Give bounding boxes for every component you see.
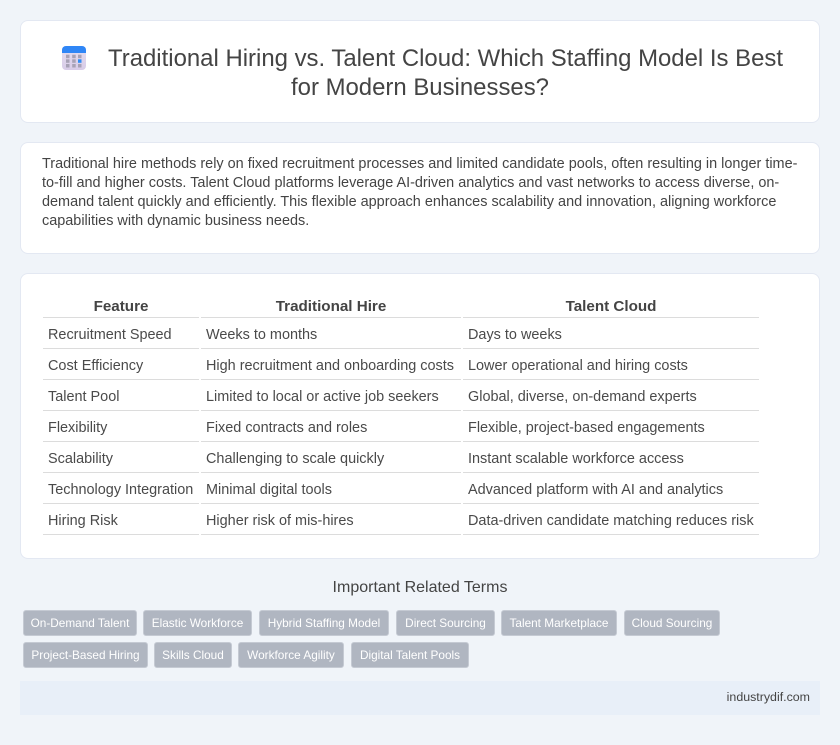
title: Traditional Hiring vs. Talent Cloud: Which Staffing Model Is Best [108, 45, 783, 72]
description text: demand talent quickly and efficiently. This flexible approach enhances scalability and innovation, aligning workforce [42, 194, 776, 210]
tag [23, 610, 137, 636]
row: talent pool [48, 389, 697, 405]
row: cost efficiency [48, 358, 688, 374]
row: cost efficiency: Cost Efficiency [48, 358, 143, 374]
related terms heading: Important Related Terms [333, 579, 507, 596]
row: technology integration: Minimal digital tools [206, 482, 332, 498]
tag: Elastic Workforce [152, 616, 243, 630]
tag [154, 642, 232, 668]
tag: Digital Talent Pools [360, 648, 460, 662]
row: technology integration: Technology Integration [48, 482, 193, 498]
tag: Hybrid Staffing Model [268, 616, 380, 630]
icon: calendar [62, 46, 86, 70]
tag: Talent Marketplace [509, 616, 608, 630]
row: talent pool: Global, diverse, on-demand experts [468, 389, 697, 405]
column headings: Feature [94, 298, 148, 315]
description text: Traditional hire methods rely on fixed recruitment processes and limited candidate pools, often resulting in longer time- [42, 156, 797, 172]
row: recruitment speed: Weeks to months [206, 327, 317, 343]
title: for Modern Businesses? [291, 74, 549, 101]
row: scalability: Instant scalable workforce access [468, 451, 684, 467]
description text: capabilities with dynamic business needs. [42, 213, 309, 229]
tag [23, 642, 148, 668]
tag: On-Demand Talent [31, 616, 129, 630]
description text [42, 156, 797, 229]
row: hiring risk [48, 513, 754, 529]
title [108, 45, 783, 101]
tag: Direct Sourcing [405, 616, 486, 630]
description text: to-fill and higher costs. Talent Cloud platforms leverage AI-driven analytics and vast networks to access diverse, on- [42, 175, 779, 191]
row: cost efficiency: Lower operational and hiring costs [468, 358, 688, 374]
row: hiring risk: Data-driven candidate matching reduces risk [468, 513, 754, 529]
row: flexibility [48, 420, 705, 436]
row: scalability: Challenging to scale quickly [206, 451, 384, 467]
tag [238, 642, 344, 668]
tag: Skills Cloud [162, 648, 224, 662]
row: talent pool: Talent Pool [48, 389, 119, 405]
tag [624, 610, 720, 636]
row: hiring risk: Hiring Risk [48, 513, 118, 529]
row: cost efficiency: High recruitment and onboarding costs [206, 358, 454, 374]
tag [351, 642, 469, 668]
related terms tags [23, 610, 720, 668]
header card [20, 20, 820, 123]
description card [20, 142, 820, 254]
row: recruitment speed: Recruitment Speed [48, 327, 172, 343]
tag: Cloud Sourcing [632, 616, 712, 630]
row: recruitment speed: Days to weeks [468, 327, 562, 343]
tag [501, 610, 617, 636]
tag: Project-Based Hiring [31, 648, 140, 662]
row: recruitment speed [48, 327, 562, 343]
tag: Workforce Agility [247, 648, 335, 662]
row: flexibility: Fixed contracts and roles [206, 420, 367, 436]
comparison table [43, 298, 759, 535]
tag [143, 610, 252, 636]
column headings [94, 298, 656, 315]
row: hiring risk: Higher risk of mis-hires [206, 513, 354, 529]
tag [259, 610, 389, 636]
row: flexibility: Flexibility [48, 420, 107, 436]
row: flexibility: Flexible, project-based engagements [468, 420, 705, 436]
footer source: industrydif.com [727, 690, 810, 704]
column headings: Talent Cloud [566, 298, 656, 315]
row: scalability [48, 451, 684, 467]
comparison table panel [20, 273, 820, 559]
column headings: Traditional Hire [276, 298, 386, 315]
footer bar [20, 681, 820, 715]
row: talent pool: Limited to local or active job seekers [206, 389, 439, 405]
row: technology integration [48, 482, 723, 498]
tag [396, 610, 495, 636]
row: scalability: Scalability [48, 451, 113, 467]
row: technology integration: Advanced platform with AI and analytics [468, 482, 723, 498]
